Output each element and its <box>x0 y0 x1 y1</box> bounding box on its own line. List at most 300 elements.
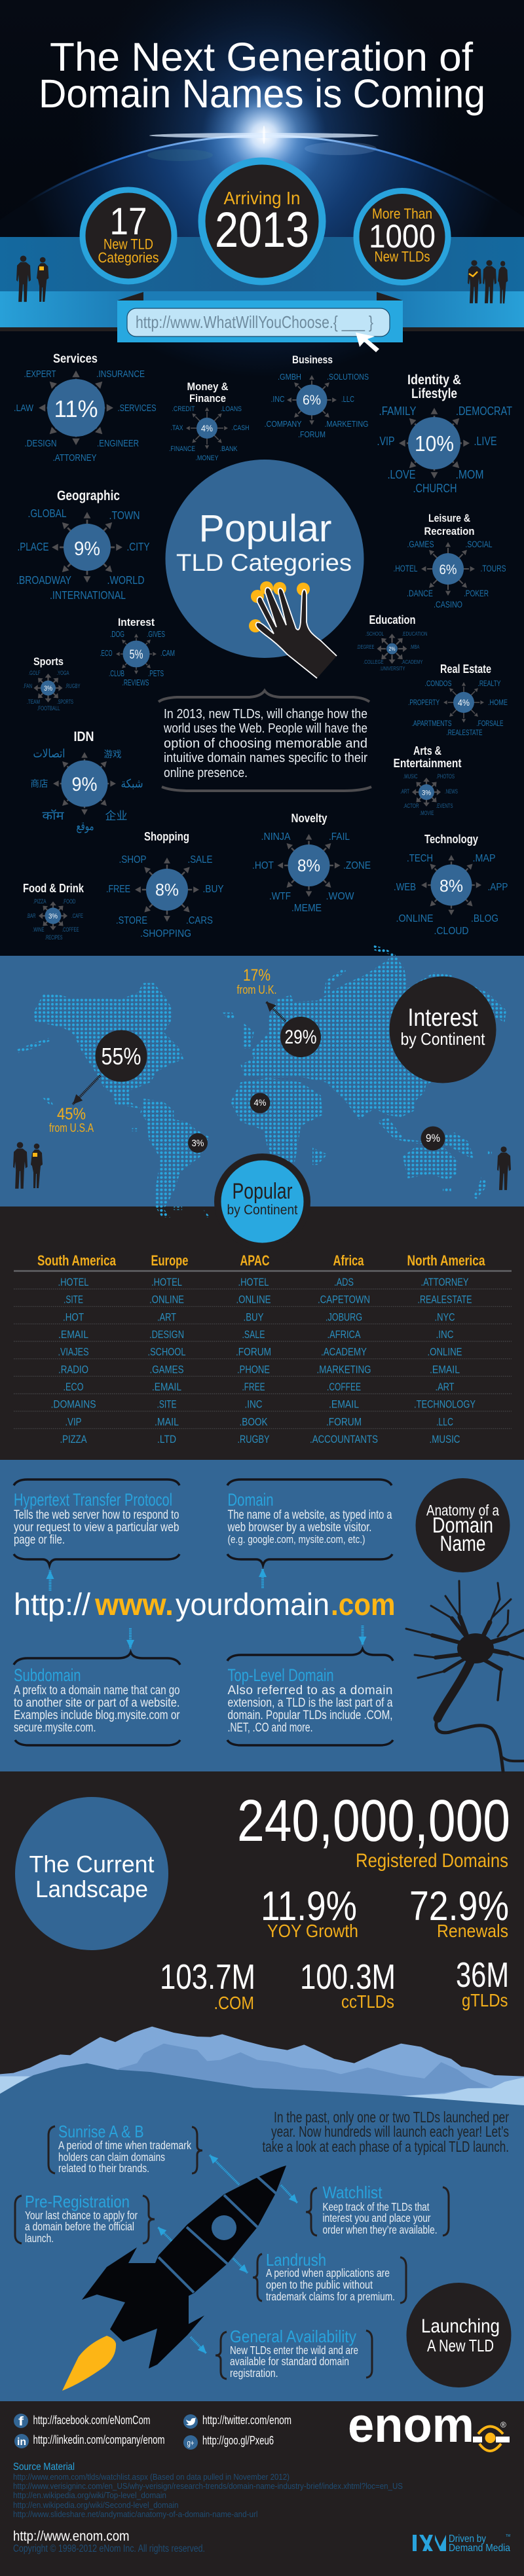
text block: Top-Level Domain: extension, a TLD is the last part of a <box>228 1696 393 1710</box>
chart: IDN 9%: 9% <box>72 774 97 795</box>
arrow: to Sunrise <box>210 2155 239 2185</box>
labels: Services TLDs: .EXPERT <box>24 369 56 380</box>
labels: Business TLDs: .LLC <box>341 394 354 404</box>
panel: launching a new TLD <box>0 2027 524 2401</box>
labels: Arts & Entertainment TLDs: .MUSIC <box>403 773 418 780</box>
icon: business people right <box>468 260 508 304</box>
column: Africa: .ACCOUNTANTS <box>310 1433 378 1445</box>
text block: source material: http://www.verisigninc.com/en_US/why-verisign/research-trends/domain-name-industry-brief/index.xhtml?loc=en_US <box>13 2481 403 2491</box>
labels: Geographic TLDs: .CITY <box>127 540 150 553</box>
heading: Anatomy of a Domain Name <box>415 1478 510 1572</box>
labels: Leisure & Recreation TLDs: .CASINO <box>434 600 462 609</box>
heading: Money & Finance <box>187 380 228 405</box>
chart: Shopping 8% <box>135 858 199 922</box>
labels: Leisure & Recreation TLDs: .POKER <box>464 589 489 598</box>
heading: Money & Finance: Money & <box>187 380 228 393</box>
circle: 17 new TLD categories: Categories <box>98 249 159 266</box>
heading: Popular by Continent <box>214 1153 310 1250</box>
chart: Geographic 9%: 9% <box>74 538 100 560</box>
labels: Education TLDs <box>356 630 427 672</box>
text block: Hypertext Transfer Protocol: Hypertext Transfer Protocol <box>14 1490 172 1510</box>
chart: dotted world map <box>0 943 524 1224</box>
labels: Money & Finance TLDs: .LOANS <box>221 405 242 413</box>
icon: neuron tree <box>406 1581 524 1771</box>
text block: Domain: web browser by a website visitor. <box>227 1521 372 1534</box>
column: Europe: .DESIGN <box>149 1328 184 1341</box>
stat: 100.3M ccTLDs: 100.3M <box>300 1957 396 1997</box>
text block: Subdomain: secure.mysite.com. <box>14 1721 96 1735</box>
heading: Interest by Continent: by Continent <box>401 1029 485 1049</box>
arrow: 29% to UK <box>266 1002 286 1021</box>
heading: Arts & Entertainment: Entertainment <box>393 757 461 770</box>
stat: 11.9% YOY growth: 11.9% <box>261 1883 357 1929</box>
labels: Education TLDs: .DEGREE <box>356 644 375 650</box>
column: Africa: .FORUM <box>326 1415 362 1428</box>
labels: IDN scripts: 商店 <box>30 779 48 789</box>
labels: Food & Drink TLDs: .FOOD <box>63 898 76 905</box>
column: APAC: .PHONE <box>237 1363 270 1375</box>
callout: Pre-Registration: Pre-Registration <box>25 2192 130 2211</box>
labels: Leisure & Recreation TLDs: .DANCE <box>407 589 433 598</box>
logo: driven by demand media: Demand Media <box>449 2543 510 2554</box>
text block: intro with braces: world uses the Web. People will have the <box>163 721 367 736</box>
chart: Identity & Lifestyle 10% <box>399 408 470 479</box>
column: North America <box>414 1276 476 1445</box>
callout: 45% from USA: from U.S.A <box>49 1121 94 1134</box>
table header row <box>37 1252 485 1269</box>
column: South America: .DOMAINS <box>51 1398 96 1411</box>
panel: Business <box>265 354 369 439</box>
panel: Sports <box>23 655 81 712</box>
labels: Shopping TLDs <box>106 854 224 939</box>
labels: Services TLDs <box>14 369 156 463</box>
text block: Top-Level Domain <box>228 1665 393 1735</box>
text block: Top-Level Domain: .NET, .CO and more. <box>228 1721 313 1735</box>
text block: Top-Level Domain: Top-Level Domain <box>228 1665 334 1685</box>
stat: 103.7M .COM: 103.7M <box>160 1957 255 1997</box>
column: APAC: .SALE <box>242 1328 265 1341</box>
labels: Novelty TLDs: .ZONE <box>343 860 371 871</box>
column: South America: .SITE <box>64 1294 83 1306</box>
labels: Real Estate TLDs: .HOME <box>488 699 508 707</box>
callout: 4% Africa <box>250 1093 270 1113</box>
brace: protocol top <box>14 1479 179 1485</box>
arrow: to Watchlist <box>281 2185 297 2203</box>
heading: Anatomy of a Domain Name: Anatomy of a <box>426 1502 499 1519</box>
labels: Services TLDs: .ENGINEER <box>97 438 139 449</box>
column: Europe: .HOTEL <box>151 1276 182 1288</box>
column: Europe: .ART <box>157 1311 176 1323</box>
text block: Subdomain: Subdomain <box>14 1665 81 1685</box>
ribbon band <box>0 237 524 331</box>
column: North America: .ONLINE <box>427 1346 462 1358</box>
chart: Shopping 8%: 8% <box>155 880 179 899</box>
social: facebook: http://facebook.com/eNomCom <box>33 2414 151 2427</box>
column: APAC: .ONLINE <box>236 1294 271 1306</box>
text: website and copyright <box>13 2529 205 2554</box>
heading: Popular TLD Categories <box>176 507 352 576</box>
labels: Identity & Lifestyle TLDs: .VIP <box>377 435 394 448</box>
labels: Shopping TLDs: .FREE <box>106 884 130 895</box>
labels: Business TLDs: .COMPANY <box>265 419 302 429</box>
heading: Money & Finance: Finance <box>189 392 226 405</box>
heading: Novelty: Novelty <box>291 812 328 825</box>
chart: Real Estate 4% <box>443 682 484 723</box>
labels: Arts & Entertainment TLDs: .NEWS <box>445 788 458 795</box>
column: Africa: .ADS <box>334 1276 354 1288</box>
labels: Real Estate TLDs: .REALESTATE <box>447 729 483 737</box>
column: Europe: .LTD <box>157 1433 176 1445</box>
panel: Popular TLD Categories circle <box>165 460 364 678</box>
table header row: Africa <box>333 1252 364 1269</box>
chart: Technology 8%: 8% <box>440 876 463 896</box>
text: example URL: http:// <box>14 1587 91 1622</box>
stat: 103.7M .COM <box>160 1957 255 2013</box>
labels: Geographic TLDs: .PLACE <box>17 540 48 553</box>
stat: 36M gTLDs <box>456 1955 509 2010</box>
labels: Arts & Entertainment TLDs: .MOVIE <box>419 810 434 816</box>
labels: Interest TLDs: .GIVES <box>147 630 165 639</box>
icon: rocket flame <box>62 2336 116 2391</box>
labels: Technology TLDs: .BLOG <box>471 913 498 924</box>
illustration: mountains <box>0 2027 524 2114</box>
heading: Launching A New TLD <box>406 2283 511 2387</box>
labels: Identity & Lifestyle TLDs: .LIVE <box>474 435 496 448</box>
callout: 29% Europe: 29% <box>284 1026 317 1048</box>
labels: Business TLDs: .FORUM <box>298 429 326 439</box>
column: South America: .HOTEL <box>58 1276 89 1288</box>
labels: Food & Drink TLDs: .WINE <box>33 926 45 934</box>
heading: Arts & Entertainment <box>393 744 461 770</box>
text block: Top-Level Domain: Also referred to as a domain <box>228 1684 393 1697</box>
circle: more than 1000 new TLDs: New TLDs <box>375 249 430 264</box>
labels: Interest TLDs: .REVIEWS <box>122 678 149 687</box>
icon: business person map right <box>497 1146 511 1190</box>
social: twitter: http://twitter.com/enom <box>202 2414 291 2427</box>
labels: Geographic TLDs: .WORLD <box>107 573 144 587</box>
heading: Interest: Interest <box>118 616 155 628</box>
labels: Leisure & Recreation TLDs: .TOURS <box>481 564 506 573</box>
heading: Interest by Continent: Interest <box>407 1004 478 1032</box>
panel: Services <box>14 352 156 463</box>
brace: TLD top <box>227 1649 393 1661</box>
text block: Domain <box>227 1490 392 1546</box>
column: Africa <box>310 1276 378 1445</box>
labels: Interest TLDs: .DOG <box>110 630 124 639</box>
heading: The Current Landscape <box>15 1797 168 1950</box>
labels: IDN scripts: 企业 <box>105 810 127 823</box>
column: North America: .MUSIC <box>430 1433 460 1445</box>
labels: Identity & Lifestyle TLDs: .MOM <box>456 468 483 481</box>
labels: Food & Drink TLDs: .PIZZA <box>33 898 47 905</box>
labels: IDN scripts: موقع <box>76 820 94 833</box>
brace: domain bottom <box>227 1554 392 1565</box>
heading: Leisure & Recreation <box>424 512 474 537</box>
chart: Education 2%: 2% <box>389 646 396 652</box>
labels: Money & Finance TLDs: .FINANCE <box>169 445 195 453</box>
heading: Popular TLD Categories: TLD Categories <box>176 549 352 576</box>
labels: IDN scripts: कॉम <box>42 809 65 823</box>
labels: Real Estate TLDs: .APARTMENTS <box>411 720 452 728</box>
column: North America: .EMAIL <box>430 1363 460 1375</box>
labels: Technology TLDs: .WEB <box>394 882 416 893</box>
icon: hand touching <box>249 581 337 678</box>
labels: Business TLDs: .MARKETING <box>325 419 368 429</box>
title: The Next Generation of <box>50 35 474 79</box>
column: South America: .PIZZA <box>60 1433 87 1445</box>
callout: General Availability: New TLDs enter the wild and are <box>230 2344 358 2357</box>
labels: Novelty TLDs: .NINJA <box>261 831 291 843</box>
icon: rocket <box>82 2166 286 2368</box>
labels: Identity & Lifestyle TLDs: .FAMILY <box>379 405 417 418</box>
labels: Geographic TLDs: .INTERNATIONAL <box>50 589 126 602</box>
labels: Food & Drink TLDs <box>26 898 83 941</box>
table header row: North America <box>407 1252 485 1269</box>
icon: business people map left <box>13 1142 43 1189</box>
labels: Technology TLDs: .TECH <box>407 853 433 864</box>
labels: Novelty TLDs: .WOW <box>326 891 354 902</box>
table header row: Europe <box>151 1252 189 1269</box>
labels: Services TLDs: .DESIGN <box>25 438 56 449</box>
callout: Pre-Registration: Your last chance to apply for <box>25 2209 138 2222</box>
labels: Shopping TLDs: .CARS <box>186 915 213 926</box>
labels: Real Estate TLDs: .REALTY <box>478 680 501 688</box>
column: South America: .VIP <box>66 1415 81 1428</box>
circle: more than 1000 new TLDs: 1000 <box>369 218 436 255</box>
labels: Shopping TLDs: .SHOPPING <box>140 928 191 939</box>
labels: Real Estate TLDs: .PROPERTY <box>408 699 440 707</box>
text block: Domain: Domain <box>228 1490 274 1510</box>
column: APAC <box>236 1276 271 1445</box>
circle: more than 1000 new TLDs <box>356 191 448 283</box>
labels: Business TLDs <box>265 372 369 439</box>
column: Europe: .ONLINE <box>149 1294 184 1306</box>
labels: Novelty TLDs <box>252 831 371 914</box>
callout: Landrush: A period when applications are <box>266 2266 390 2279</box>
text: example URL: yourdomain <box>176 1587 329 1622</box>
callout: General Availability <box>215 2327 372 2380</box>
panel: the current landscape <box>15 1788 510 2013</box>
callout: Sunrise A & B: A period of time when trademark <box>58 2139 191 2152</box>
callout: Sunrise A & B: holders can claim domains <box>58 2150 165 2164</box>
labels: Money & Finance TLDs: .CREDIT <box>172 405 195 413</box>
labels: Food & Drink TLDs: .COFFEE <box>62 926 79 934</box>
labels: Arts & Entertainment TLDs: .EVENTS <box>436 803 453 809</box>
callout: Landrush <box>253 2250 406 2303</box>
labels: Identity & Lifestyle TLDs: .CHURCH <box>413 482 457 495</box>
chart: Food & Drink 3%: 3% <box>48 913 58 920</box>
heading: Geographic: Geographic <box>57 488 120 503</box>
labels: Education TLDs: .COLLEGE <box>363 659 384 665</box>
labels: Education TLDs: .UNIVERSITY <box>380 665 405 672</box>
column: APAC: .INC <box>245 1398 262 1411</box>
column: APAC: .BOOK <box>240 1415 268 1428</box>
chart: Novelty 8%: 8% <box>297 856 320 875</box>
chart: IDN 9% <box>53 752 116 815</box>
stat: 72.9% renewals: 72.9% <box>409 1883 509 1929</box>
text block: intro with braces: In 2013, new TLDs, will change how the <box>164 707 367 721</box>
text block: Subdomain <box>14 1665 180 1735</box>
callout: Pre-Registration: launch. <box>25 2232 54 2245</box>
brace: protocol bottom <box>14 1554 179 1565</box>
chart: Money & Finance 4%: 4% <box>201 423 213 433</box>
social: linkedin: in <box>17 2437 26 2448</box>
column: Europe: .EMAIL <box>152 1381 181 1393</box>
labels: Shopping TLDs: .STORE <box>116 915 147 926</box>
stat: 36M gTLDs: 36M <box>456 1955 509 1995</box>
panel: Food & Drink <box>23 882 84 941</box>
panel: Arts & Entertainment <box>393 744 461 816</box>
header: space and earth <box>0 0 524 1043</box>
stat: 72.9% renewals: Renewals <box>437 1921 508 1941</box>
column: North America: .INC <box>436 1328 453 1341</box>
labels: Arts & Entertainment TLDs <box>400 773 458 816</box>
brace: subdomain top <box>14 1652 180 1665</box>
panel: IDN <box>30 729 143 833</box>
chart: Sports 3%: 3% <box>44 685 52 693</box>
heading: Launching A New TLD: A New TLD <box>427 2336 494 2355</box>
panel: Shopping <box>106 830 224 939</box>
callout: 55% North America <box>96 1030 147 1081</box>
heading: Services: Services <box>53 352 98 366</box>
labels: Identity & Lifestyle TLDs: .LOVE <box>388 468 415 481</box>
column: South America <box>51 1276 96 1445</box>
labels: Food & Drink TLDs: .BAR <box>26 913 36 920</box>
text block: intro with braces <box>159 691 371 791</box>
icon: business people left <box>16 255 48 302</box>
labels: Geographic TLDs: .BROADWAY <box>16 573 71 587</box>
column: Europe: .SCHOOL <box>148 1346 186 1358</box>
stat: 103.7M .COM: .COM <box>214 1993 254 2013</box>
column: Africa: .EMAIL <box>329 1398 359 1411</box>
text block: Top-Level Domain: domain. Popular TLDs include .COM, <box>228 1709 393 1722</box>
panel: Identity & Lifestyle <box>377 372 512 495</box>
circle: 17 new TLD categories <box>83 190 174 281</box>
text block: Hypertext Transfer Protocol: Tells the web server how to respond to <box>14 1508 179 1522</box>
arrow: to Pre-Registration <box>158 2227 172 2241</box>
labels: Services TLDs: .INSURANCE <box>96 369 145 380</box>
heading: The Current Landscape: Landscape <box>35 1876 148 1902</box>
labels: Sports TLDs: .FOOTBALL <box>37 705 60 712</box>
labels: Services TLDs: .SERVICES <box>118 403 156 414</box>
column: Europe: .SITE <box>157 1398 177 1411</box>
labels: Sports TLDs: .TEAM <box>27 698 40 706</box>
text block: Subdomain: A prefix to a domain name that can go <box>14 1684 179 1697</box>
panel: Novelty <box>252 812 371 914</box>
circle: more than 1000 new TLDs: More Than <box>372 206 432 222</box>
text block: source material: Source Material <box>13 2461 75 2473</box>
labels: Leisure & Recreation TLDs: .SOCIAL <box>465 539 493 549</box>
heading: Identity & Lifestyle <box>407 372 461 401</box>
panel: footer <box>0 2397 524 2576</box>
text block: launch intro <box>262 2109 509 2155</box>
labels: Money & Finance TLDs <box>169 405 250 462</box>
chart: Leisure & Recreation 6% <box>421 542 475 596</box>
callout: Watchlist: interest you and place your <box>322 2211 431 2224</box>
labels: Novelty TLDs: .FAIL <box>329 831 350 843</box>
labels: Leisure & Recreation TLDs <box>393 539 506 609</box>
logo: enom: ® <box>500 2420 506 2429</box>
arrow: up to domain <box>261 1569 264 1588</box>
labels: IDN scripts <box>30 747 143 833</box>
chart: Business 6%: 6% <box>303 393 321 408</box>
chart: Interest 5%: 5% <box>130 648 143 662</box>
callout: 3% South America <box>188 1133 208 1153</box>
labels: Technology TLDs <box>394 853 508 937</box>
circle: arriving in 2013: Arriving In <box>224 188 300 208</box>
callout: 29% Europe <box>280 1017 321 1057</box>
arrow: 55% to USA <box>73 1076 100 1104</box>
chart: Business 6% <box>287 375 337 425</box>
brace: domain top <box>227 1479 392 1485</box>
text block: source material: http://en.wikipedia.org/wiki/Top-level_domain <box>13 2490 166 2500</box>
logo: enom: enom <box>348 2397 474 2452</box>
labels: Real Estate TLDs: .FORSALE <box>477 720 504 728</box>
callout: Watchlist: Watchlist <box>322 2183 383 2202</box>
callout: Landrush: open to the public without <box>266 2278 373 2291</box>
labels: Sports TLDs: .SPORTS <box>57 698 73 706</box>
callout: Watchlist <box>306 2183 449 2236</box>
panel: Technology <box>394 832 508 937</box>
labels: Sports TLDs: .RUGBY <box>66 683 81 690</box>
search box <box>117 292 403 342</box>
column: North America: .NYC <box>435 1311 455 1323</box>
callout: Sunrise A & B <box>48 2122 202 2175</box>
heading: Leisure & Recreation: Recreation <box>424 525 474 537</box>
circle: arriving in 2013: 2013 <box>215 202 309 258</box>
column: South America: .EMAIL <box>58 1328 88 1341</box>
circle: 17 new TLD categories: 17 <box>110 200 147 243</box>
column: Africa: .JOBURG <box>326 1311 362 1323</box>
callout: Sunrise A & B: related to their brands. <box>58 2162 149 2175</box>
labels: Interest TLDs: .CAM <box>160 649 175 658</box>
heading: Technology: Technology <box>424 832 479 846</box>
text block: source material: http://www.enom.com/tlds/watchlist.aspx (Based on data pulled in November 2012) <box>13 2472 290 2482</box>
callout: Watchlist: order when they’re available. <box>322 2223 438 2236</box>
social: facebook <box>14 2414 151 2429</box>
callout: 55% North America: 55% <box>101 1043 141 1070</box>
heading: Sports: Sports <box>33 655 64 668</box>
panel: Leisure & Recreation <box>393 512 506 609</box>
column: Europe: .MAIL <box>155 1415 179 1428</box>
labels: Education TLDs: .MBA <box>410 644 420 650</box>
heading: The Current Landscape: The Current <box>29 1851 155 1878</box>
chart: Geographic 9% <box>52 512 122 583</box>
callout: General Availability: General Availability <box>230 2327 356 2346</box>
circle: 17 new TLD categories: New TLD <box>103 236 153 253</box>
text block: intro with braces: online presence. <box>164 766 248 780</box>
text block: intro with braces: option of choosing memorable and <box>164 736 367 751</box>
chart: Services 11% <box>39 371 113 445</box>
stat: 100.3M ccTLDs <box>300 1957 396 2012</box>
heading: Arts & Entertainment: Arts & <box>413 744 441 757</box>
labels: Arts & Entertainment TLDs: .PHOTOS <box>436 773 455 780</box>
heading: Real Estate: Real Estate <box>440 662 491 676</box>
logo: driven by demand media <box>413 2533 510 2554</box>
labels: Shopping TLDs: .BUY <box>203 884 224 895</box>
column: APAC: .FORUM <box>236 1346 271 1358</box>
labels: Services TLDs: .ATTORNEY <box>52 452 97 463</box>
column: APAC: .HOTEL <box>238 1276 269 1288</box>
icon: mouse cursor <box>356 333 379 352</box>
social: google plus: http://goo.gl/Pxeu6 <box>202 2434 274 2447</box>
table header row: South America <box>37 1252 117 1269</box>
search box: http://www.WhatWillYouChoose.{ ___ } <box>136 312 373 332</box>
callout: 45% from USA: 45% <box>57 1105 86 1123</box>
column: Africa: .COFFEE <box>327 1381 361 1393</box>
text block: Hypertext Transfer Protocol: page or file. <box>14 1533 65 1547</box>
social: google plus: g+ <box>187 2438 194 2448</box>
